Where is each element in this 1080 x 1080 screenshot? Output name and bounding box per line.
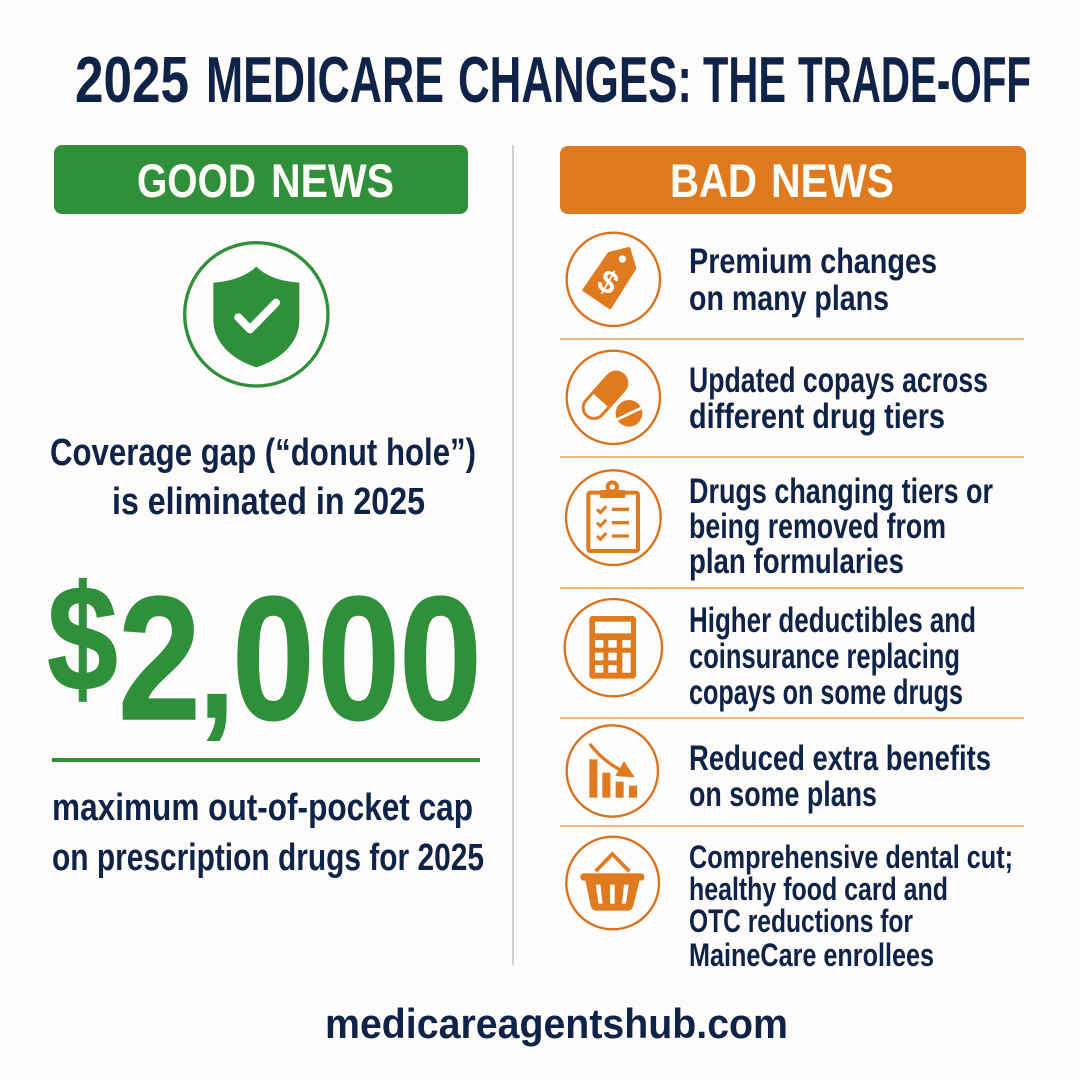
text: premium changes: Premium changes xyxy=(689,242,937,281)
coverage gap text xyxy=(50,432,476,523)
text: updated copays xyxy=(689,361,988,436)
icon: pills xyxy=(567,351,660,444)
text: updated copays: Updated copays across xyxy=(689,361,988,400)
icon: calculator xyxy=(565,599,662,696)
title: THE xyxy=(703,43,786,116)
bad news header xyxy=(560,146,1026,214)
text: drugs changing tiers xyxy=(689,472,993,581)
text: higher deductibles: coinsurance replacing xyxy=(689,637,960,676)
icon: price tag: $ xyxy=(591,262,625,302)
big number: $2,000: $ xyxy=(47,555,118,722)
icon: shield with check xyxy=(185,243,328,386)
panel: good news xyxy=(47,145,484,879)
big number: $2,000: 0 xyxy=(232,560,315,757)
bad news header: BAD xyxy=(670,154,757,207)
coverage gap text: is eliminated in 2025 xyxy=(112,481,425,523)
text: drugs changing tiers: being removed from xyxy=(689,507,946,546)
big number: $2,000: 0 xyxy=(399,560,482,757)
text: drugs changing tiers: plan formularies xyxy=(689,542,904,581)
big number: $2,000: , xyxy=(199,582,234,749)
text: updated copays: different drug tiers xyxy=(689,397,945,436)
text: higher deductibles: Higher deductibles and xyxy=(689,601,976,640)
good news header xyxy=(54,145,468,214)
bad news header: NEWS xyxy=(771,154,894,207)
icon: declining bar chart xyxy=(567,725,658,817)
good news header: GOOD xyxy=(137,154,256,207)
title: CHANGES: xyxy=(458,43,692,116)
text: higher deductibles: copays on some drugs xyxy=(689,673,963,712)
text: comprehensive dental cut: healthy food card and xyxy=(689,871,948,907)
title: MEDICARE xyxy=(206,43,444,116)
text: premium changes: on many plans xyxy=(689,279,889,318)
text: reduced extra benefits: on some plans xyxy=(689,775,877,814)
icon: clipboard checklist xyxy=(566,470,661,565)
icon: shopping basket xyxy=(566,837,659,929)
text: comprehensive dental cut: OTC reductions for xyxy=(689,903,913,939)
text: reduced extra benefits: Reduced extra benefits xyxy=(689,739,991,778)
cap description text xyxy=(52,787,484,879)
cap description text: on prescription drugs for 2025 xyxy=(52,837,484,879)
text: reduced extra benefits xyxy=(689,739,991,814)
text: premium changes xyxy=(689,242,937,318)
title xyxy=(75,43,1031,116)
icon: price tag xyxy=(567,233,660,326)
footer website: medicareagentshub.com xyxy=(325,1000,788,1047)
text: comprehensive dental cut: MaineCare enrollees xyxy=(689,937,934,973)
panel: bad news xyxy=(560,146,1026,973)
cap description text: maximum out-of-pocket cap xyxy=(52,787,473,829)
title: 2025 xyxy=(75,43,189,116)
text: drugs changing tiers: Drugs changing tiers or xyxy=(689,472,993,511)
big number: $2,000: 2 xyxy=(118,560,201,757)
text: higher deductibles xyxy=(689,601,976,712)
coverage gap text: Coverage gap (“donut hole”) xyxy=(50,432,476,474)
good news header: NEWS xyxy=(271,154,394,207)
text: comprehensive dental cut xyxy=(689,839,1013,973)
big number: $2,000: 0 xyxy=(317,560,400,757)
